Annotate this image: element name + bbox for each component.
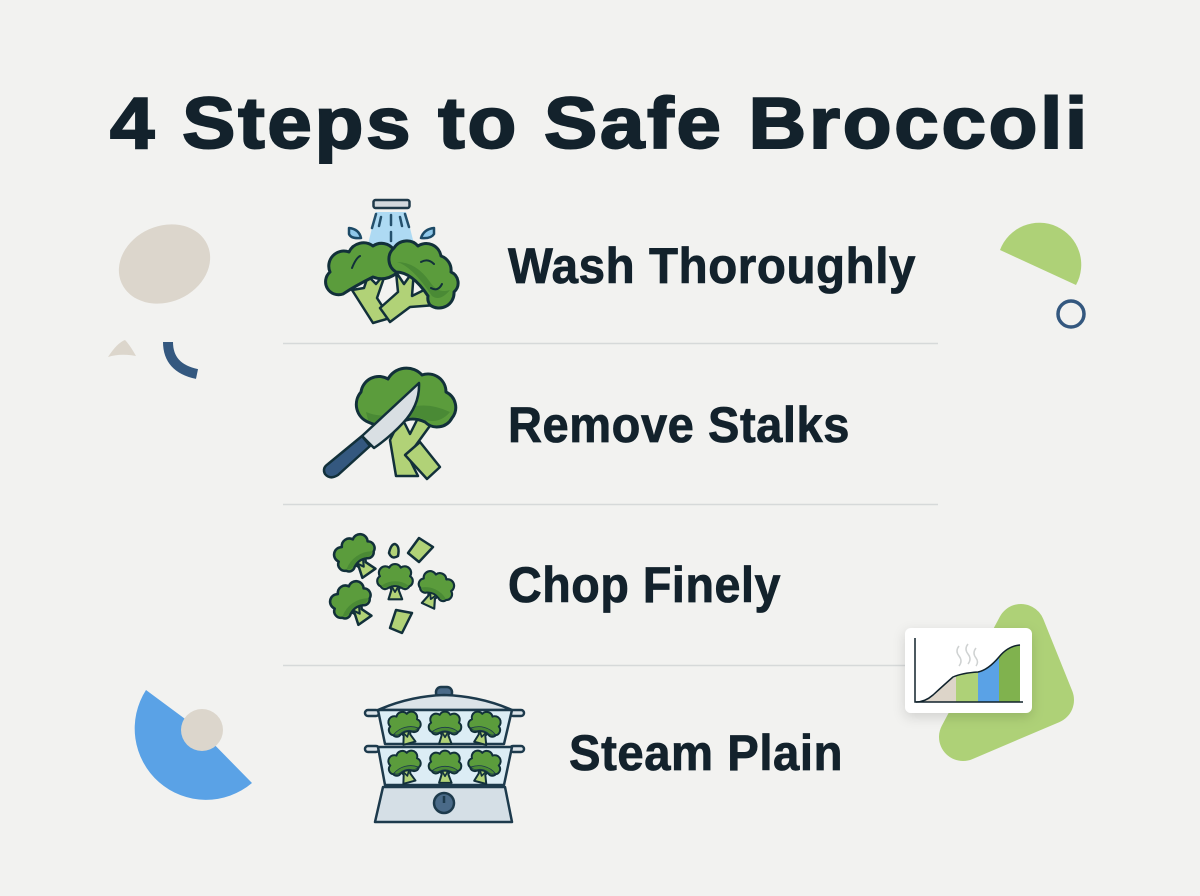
decoration: green half disc — [1000, 223, 1081, 285]
title: 4 Steps to Safe Broccoli — [110, 84, 1090, 164]
icon: broccoli under running water — [326, 200, 458, 323]
step 3: chop finely — [324, 528, 781, 633]
step label: Wash Thoroughly — [508, 238, 916, 294]
curve — [916, 645, 1020, 702]
decoration: blue sector — [135, 690, 252, 800]
decoration: navy arc — [168, 342, 197, 374]
decoration: beige ellipse — [106, 210, 223, 318]
icon: chopped broccoli pieces — [324, 528, 459, 633]
step 2: remove stalks — [324, 368, 850, 479]
steam lines — [957, 644, 978, 666]
area chart bands — [916, 645, 1020, 702]
step 4: steam plain — [365, 687, 843, 822]
step 1: wash thoroughly — [326, 200, 916, 323]
icon: knife and broccoli — [324, 368, 456, 479]
step label: Remove Stalks — [508, 397, 850, 453]
step label: Chop Finely — [508, 557, 781, 613]
decoration: green rounded triangle — [963, 628, 1050, 737]
icon: steamer — [365, 687, 524, 822]
decoration: navy ring — [1058, 301, 1084, 327]
decoration: beige circle — [181, 709, 223, 751]
decoration: small beige shape — [108, 340, 136, 357]
axes — [915, 638, 1023, 702]
step label: Steam Plain — [569, 725, 843, 781]
chart card — [905, 628, 1032, 713]
